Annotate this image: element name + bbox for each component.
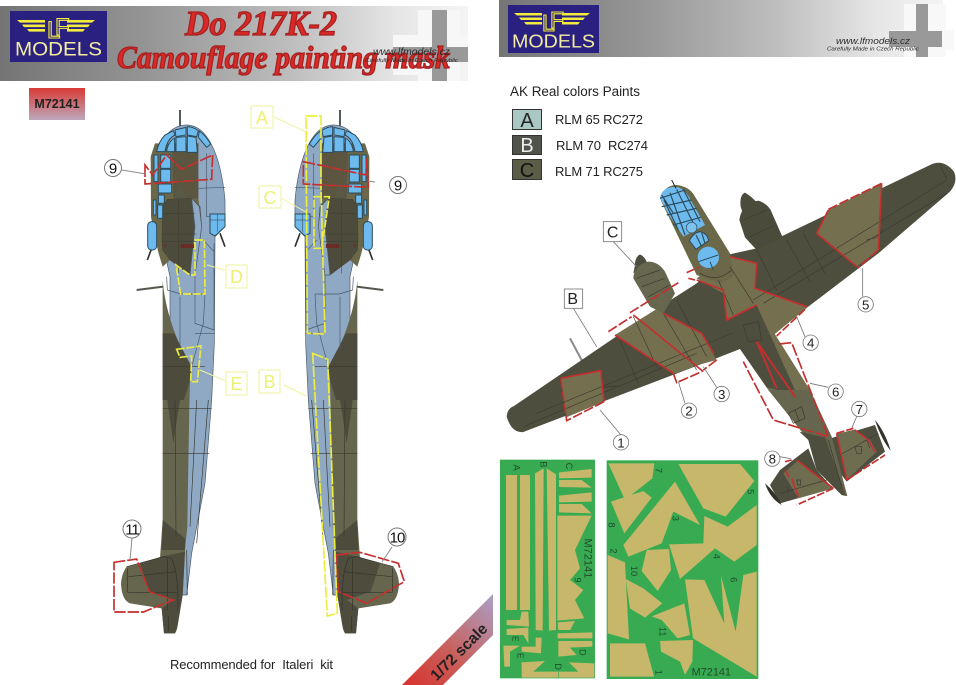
title: Camouflage painting mask [117, 39, 450, 75]
mask sheet 1 [500, 460, 595, 678]
masks on right aircraft [303, 116, 404, 616]
recommendation text: Recommended for Italeri kit [170, 657, 333, 672]
callout 9 left [104, 160, 122, 178]
yellow letter boxes: E [230, 374, 243, 394]
mask sheet 2: 11 [657, 627, 667, 637]
letter callouts: B [567, 291, 578, 308]
yellow letter boxes: A [256, 108, 268, 128]
swatch B: RLM 70 RC274 [556, 138, 648, 153]
mask sheet 2 [607, 460, 758, 679]
mask 9 right [303, 158, 368, 187]
mask sheet 2: M72141 [692, 666, 731, 678]
product code: M72141 [34, 97, 80, 111]
callout 10: 10 [390, 530, 405, 546]
title [117, 4, 450, 75]
logo: left: L [47, 17, 60, 44]
mask 2 [608, 317, 702, 383]
balkenkreuz: left [393, 10, 468, 81]
mask sheet 1: E [516, 653, 525, 658]
callout 9 right [390, 176, 406, 194]
mask B [313, 353, 337, 616]
swatch A: A [520, 110, 534, 132]
mask sheet 1: B [539, 461, 549, 467]
letter callouts: C [607, 224, 618, 241]
wing panel lines [523, 165, 947, 427]
product code [29, 88, 85, 120]
mask sheet 1: D [577, 649, 587, 656]
engine: left [633, 254, 675, 313]
yellow letter boxes: D [230, 267, 243, 287]
website text: left: Carefully Made in Czech Republic [365, 58, 458, 64]
website text: right [827, 36, 919, 52]
mask sheet 2: 5 [746, 489, 756, 494]
number callouts: 3 [718, 387, 725, 402]
mask sheet 2: 10 [629, 566, 639, 576]
aircraft underside view [507, 163, 955, 505]
website text: left [365, 47, 458, 64]
logo: left: F [55, 14, 70, 41]
callout 11 [123, 520, 141, 538]
letter callouts [564, 222, 622, 308]
balkenkreuz: right [889, 4, 954, 57]
mask sheet 1: E [510, 636, 519, 641]
mask 1 [561, 371, 604, 421]
header banner: left [0, 4, 468, 81]
yellow letter boxes [226, 106, 281, 395]
mask 5 [817, 183, 882, 268]
mask 4 [687, 257, 807, 336]
mask 7 [837, 428, 885, 480]
paint legend [510, 84, 648, 182]
leader lines and callouts: left panel [104, 106, 406, 562]
website text: right: www.lfmodels.cz [836, 36, 910, 47]
callout 9 left: 9 [109, 160, 117, 178]
callout 9 right: 9 [394, 178, 402, 194]
scale ribbon: 1/72 scale [427, 620, 492, 684]
yellow letter boxes: C [264, 188, 276, 208]
number callouts: 2 [685, 404, 693, 419]
leader lines [573, 242, 863, 459]
swatch C [512, 160, 643, 182]
logo: right: F [550, 7, 564, 33]
yellow letter boxes: B [263, 372, 276, 392]
website text: left: www.lfmodels.cz [373, 47, 450, 58]
mask 6 [743, 342, 828, 437]
mask 8 [785, 460, 833, 505]
header banner: right [499, 0, 954, 57]
wing [507, 163, 955, 432]
number callouts: 5 [862, 297, 869, 312]
nose glazing [660, 180, 719, 270]
number callouts: 6 [832, 385, 839, 400]
mask sheet 1: M72141 [581, 538, 593, 578]
number callouts: 7 [856, 402, 863, 417]
mask sheet 1: C [564, 463, 574, 470]
mask sheet 2: 8 [607, 522, 617, 528]
swatch B [512, 135, 648, 157]
logo: right [508, 5, 599, 53]
mask E outline [177, 346, 201, 382]
mask sheet 1: 9 [572, 577, 582, 583]
mask sheets [500, 460, 758, 679]
title: Do 217K-2 [184, 4, 337, 43]
mask D outline [176, 240, 205, 294]
scale ribbon [402, 594, 493, 685]
swatch A: RLM 65 RC272 [555, 112, 643, 127]
mask C [314, 197, 329, 248]
aircraft top view: left [114, 110, 225, 633]
red mask outlines [561, 183, 885, 505]
fuselage [661, 185, 828, 437]
logo: right: L [542, 10, 555, 36]
number callouts: 8 [769, 452, 776, 467]
swatch C: RLM 71 RC275 [555, 164, 643, 179]
number callouts: 1 [617, 435, 625, 450]
legend heading: AK Real colors Paints [510, 84, 640, 99]
mask 10 [337, 552, 404, 603]
mask sheet 2: 6 [728, 577, 738, 582]
antenna [570, 338, 583, 362]
swatch B: B [520, 135, 534, 157]
mask sheet 2: 7 [653, 468, 663, 473]
number callouts [613, 297, 873, 467]
mask sheet 2: 2 [608, 548, 618, 554]
mask sheet 1: D [553, 663, 563, 670]
mask sheet 1: A [512, 465, 522, 472]
mask 3 [630, 283, 717, 372]
swatch A [512, 110, 643, 132]
callout 11: 11 [125, 522, 139, 538]
mask 9 outline: left [145, 155, 213, 184]
engine: right [739, 193, 783, 250]
mask 11 outline [114, 559, 173, 612]
aircraft top view: right [295, 110, 399, 633]
logo: left [10, 11, 107, 62]
mask sheet 2: 1 [654, 670, 664, 675]
swatch C: C [520, 160, 534, 182]
website text: right: Carefully Made in Czech Republic [827, 46, 919, 52]
number callouts: 4 [807, 336, 815, 351]
logo: left: MODELS [15, 40, 102, 60]
mask A [306, 116, 325, 334]
tail [765, 390, 891, 505]
wing camouflage patches [561, 183, 882, 418]
logo: right: MODELS [512, 32, 595, 52]
mask sheet 2: 4 [711, 554, 721, 559]
mask sheet 2: 3 [670, 516, 680, 521]
